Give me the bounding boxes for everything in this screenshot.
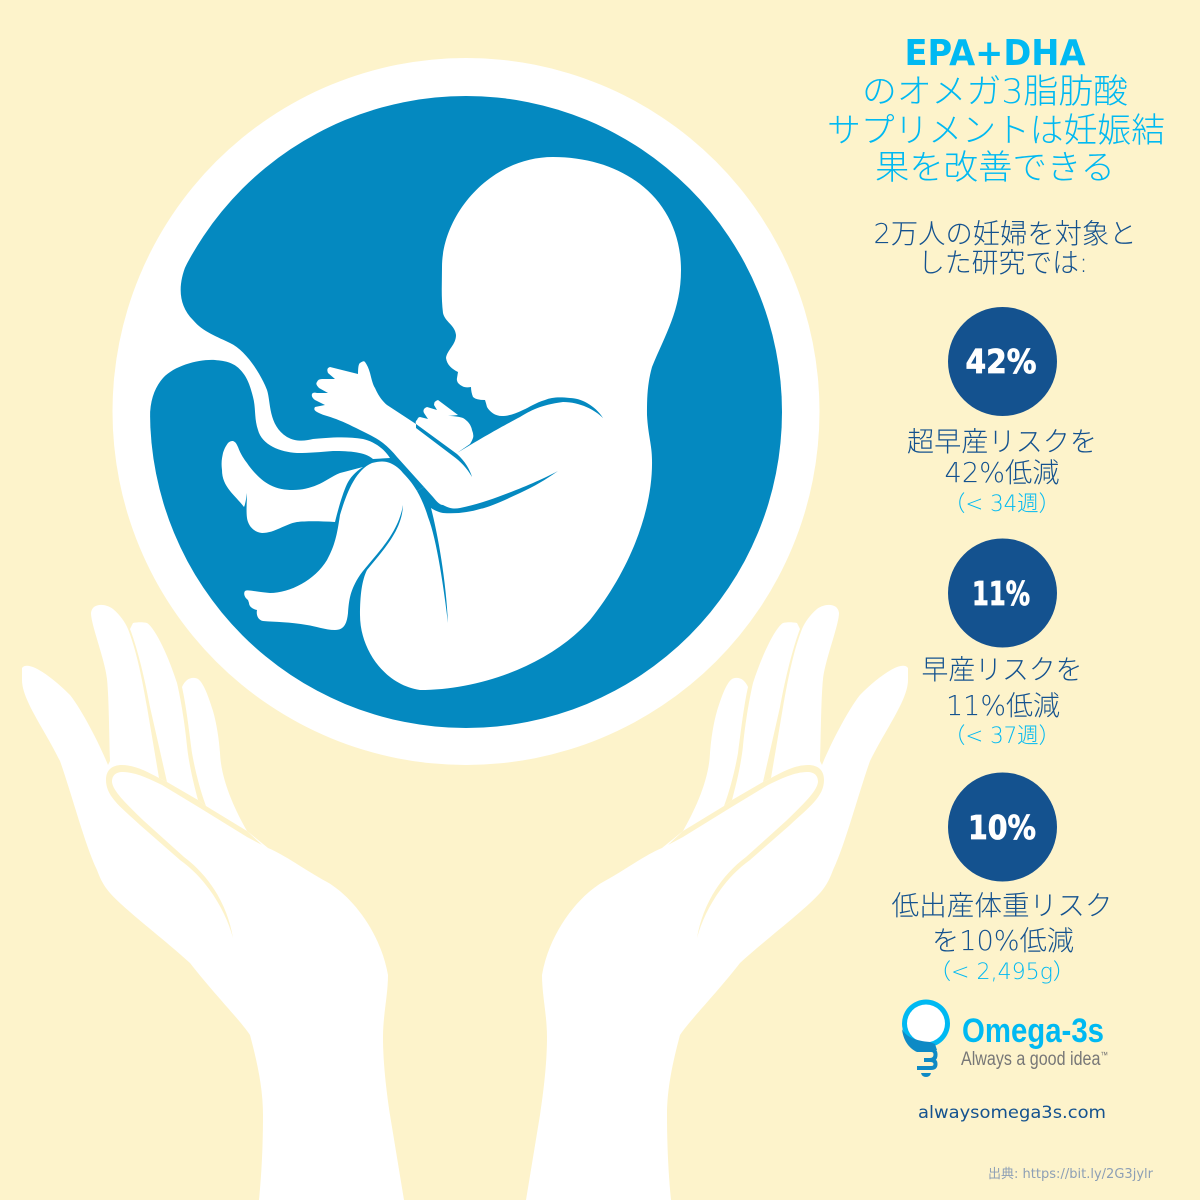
icon: left hand [22, 605, 404, 1200]
white ring [112, 58, 820, 765]
intro text: した研究では: [918, 247, 1088, 279]
palm crease [106, 765, 262, 938]
stat: 11%: （< 37週） [944, 724, 1060, 749]
logo: Omega-3s [900, 1000, 1108, 1077]
fetus blue contour between forearms [416, 424, 472, 477]
icon: right hand [526, 605, 908, 1200]
stat: 42% [907, 307, 1097, 517]
intro text [874, 218, 1136, 279]
title [827, 33, 1165, 188]
stat: 11%: 11%低減 [946, 690, 1060, 722]
umbilical cord [140, 265, 390, 459]
title: サプリメントは妊娠結 [827, 111, 1165, 151]
stat: 11%: 11% [972, 574, 1030, 613]
source: 出典: https://bit.ly/2G3jylr [988, 1167, 1154, 1182]
illustration: hands holding womb [22, 58, 908, 1200]
stat: 10%: 10% [968, 808, 1036, 847]
stat: 10%: （< 2,495g） [929, 960, 1075, 985]
logo: Omega-3s: Omega-3s [962, 1012, 1104, 1050]
logo: Omega-3s: Always a good idea [961, 1049, 1126, 1070]
website: alwaysomega3s.com [918, 1103, 1106, 1123]
title: のオメガ3脂肪酸 [862, 72, 1128, 112]
title: 果を改善できる [875, 148, 1115, 188]
stat: 42%: （< 34週） [944, 492, 1060, 517]
stat: 42%: 超早産リスクを [907, 426, 1097, 458]
fetus body, head, arm and near leg [244, 157, 681, 690]
stat: 11%: 早産リスクを [922, 654, 1082, 686]
stat: 42%: 42% [966, 342, 1036, 381]
icon: light bulb [900, 1000, 950, 1077]
fetus far leg [222, 441, 363, 533]
logo: Omega-3s: ™ [1100, 1050, 1108, 1060]
stat: 10%: を10%低減 [932, 925, 1074, 957]
stat: 42%: 42%低減 [944, 457, 1060, 489]
title: EPA+DHA [904, 33, 1086, 74]
stat: 11% [922, 538, 1082, 749]
fetus blue contour under arm and along thigh [417, 471, 558, 623]
intro text: 2万人の妊婦を対象と [874, 218, 1136, 250]
blue womb disc [150, 96, 782, 728]
stat: 10%: 低出産体重リスク [892, 890, 1112, 922]
stat: 10% [892, 772, 1112, 985]
